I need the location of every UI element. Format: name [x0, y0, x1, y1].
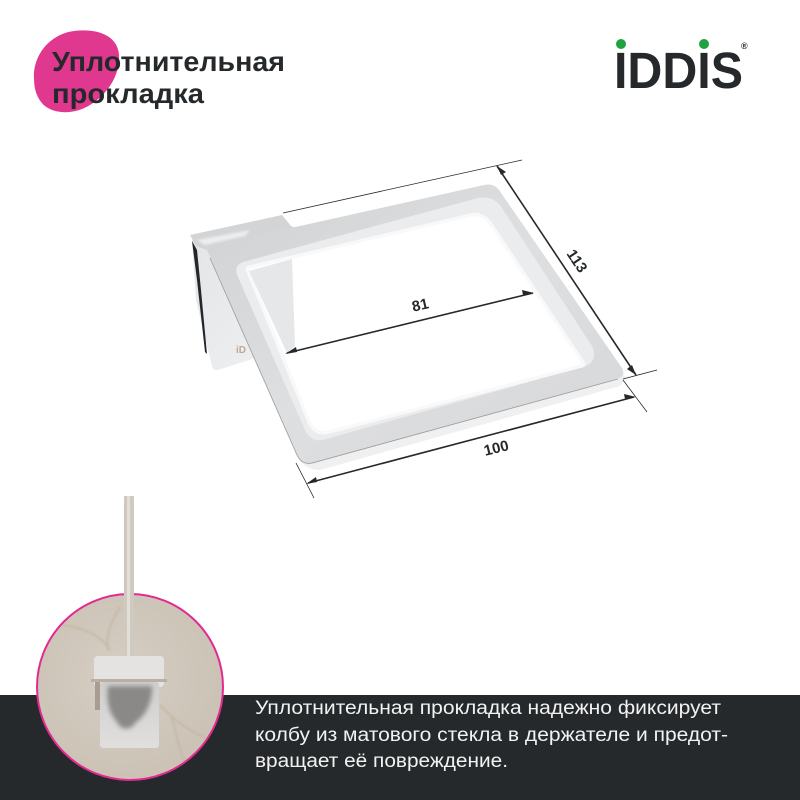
holder shelf [91, 679, 167, 682]
title text: прокладка [52, 78, 204, 109]
holder back clip [95, 682, 100, 710]
logo: IDDIS: ® [741, 41, 748, 51]
dimension lines [283, 160, 657, 498]
marble background [37, 594, 223, 780]
brush head [107, 686, 152, 729]
wall plate dark edge [192, 241, 207, 354]
gasket inner edge and opening [249, 216, 582, 431]
dimension label 100: 100 [482, 437, 511, 460]
description text: колбу из матового стекла в держателе и предот- [255, 725, 728, 746]
description text: вращает её повреждение. [255, 751, 508, 772]
wall plate [192, 240, 296, 370]
brush rod [124, 496, 134, 658]
glass rim [94, 656, 164, 687]
plate bottom thin line [210, 258, 618, 463]
plate lower shadow edge [297, 373, 626, 470]
logo: IDDIS: IDDIS [614, 42, 743, 99]
dark footer band [0, 695, 800, 800]
logo mark on wall plate: iD [236, 345, 246, 356]
dimension label 81: 81 [410, 295, 430, 316]
rod highlight [127, 496, 130, 658]
product drawing: soap dish holder with gasket [190, 160, 657, 498]
bracket top [190, 215, 300, 262]
dimension label 113: 113 [563, 246, 590, 276]
heading: pink blob and title [34, 30, 285, 112]
dimension arrowheads [285, 166, 636, 484]
photo circle: brush holder on marble [37, 496, 223, 780]
plate outer [207, 185, 623, 464]
description text: Уплотнительная прокладка надежно фиксирует [255, 698, 721, 719]
pink blob [34, 30, 119, 112]
marble veins [62, 607, 205, 765]
bracket highlight [197, 230, 250, 245]
glass body [100, 682, 159, 748]
wall visible through opening [249, 259, 295, 353]
title text: Уплотнительная [52, 46, 285, 77]
gasket ring outer [236, 197, 594, 440]
